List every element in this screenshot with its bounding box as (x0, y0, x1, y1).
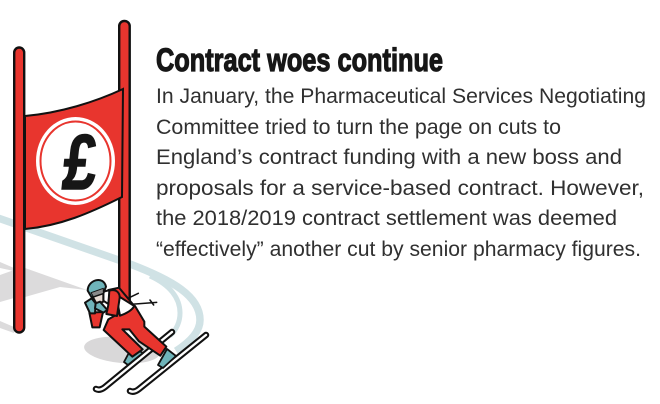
title: Contract woes continue (156, 42, 443, 78)
left pole (14, 48, 24, 332)
body text: “effectively” another cut by senior pharmacy figures. (156, 238, 641, 261)
body text: England’s contract funding with a new boss and (156, 146, 622, 169)
ground shadow (83, 334, 161, 366)
collar (103, 290, 110, 304)
arm (106, 290, 120, 316)
face (92, 292, 103, 304)
banner (25, 89, 123, 229)
pound badge (36, 117, 115, 206)
right pole (119, 21, 130, 311)
body text: In January, the Pharmaceutical Services Negotiating (156, 85, 646, 108)
torso back (108, 288, 134, 306)
body text: the 2018/2019 contract settlement was deemed (156, 207, 617, 230)
pole shadows (0, 262, 87, 333)
ski pole (122, 293, 157, 305)
forearm (89, 312, 103, 327)
skier (83, 280, 206, 392)
gloves (85, 298, 96, 313)
body text: proposals for a service-based contract. However, (156, 177, 644, 200)
skis (96, 332, 206, 392)
ski track (0, 218, 200, 351)
body text: Committee tried to turn the page on cuts to (156, 116, 561, 139)
pound badge: £ (59, 118, 101, 206)
helmet (88, 280, 106, 297)
boots (124, 347, 176, 368)
white bib (117, 295, 134, 316)
goggles (91, 288, 103, 297)
legs (104, 306, 166, 357)
flag gate (14, 21, 130, 332)
body text (156, 85, 646, 261)
